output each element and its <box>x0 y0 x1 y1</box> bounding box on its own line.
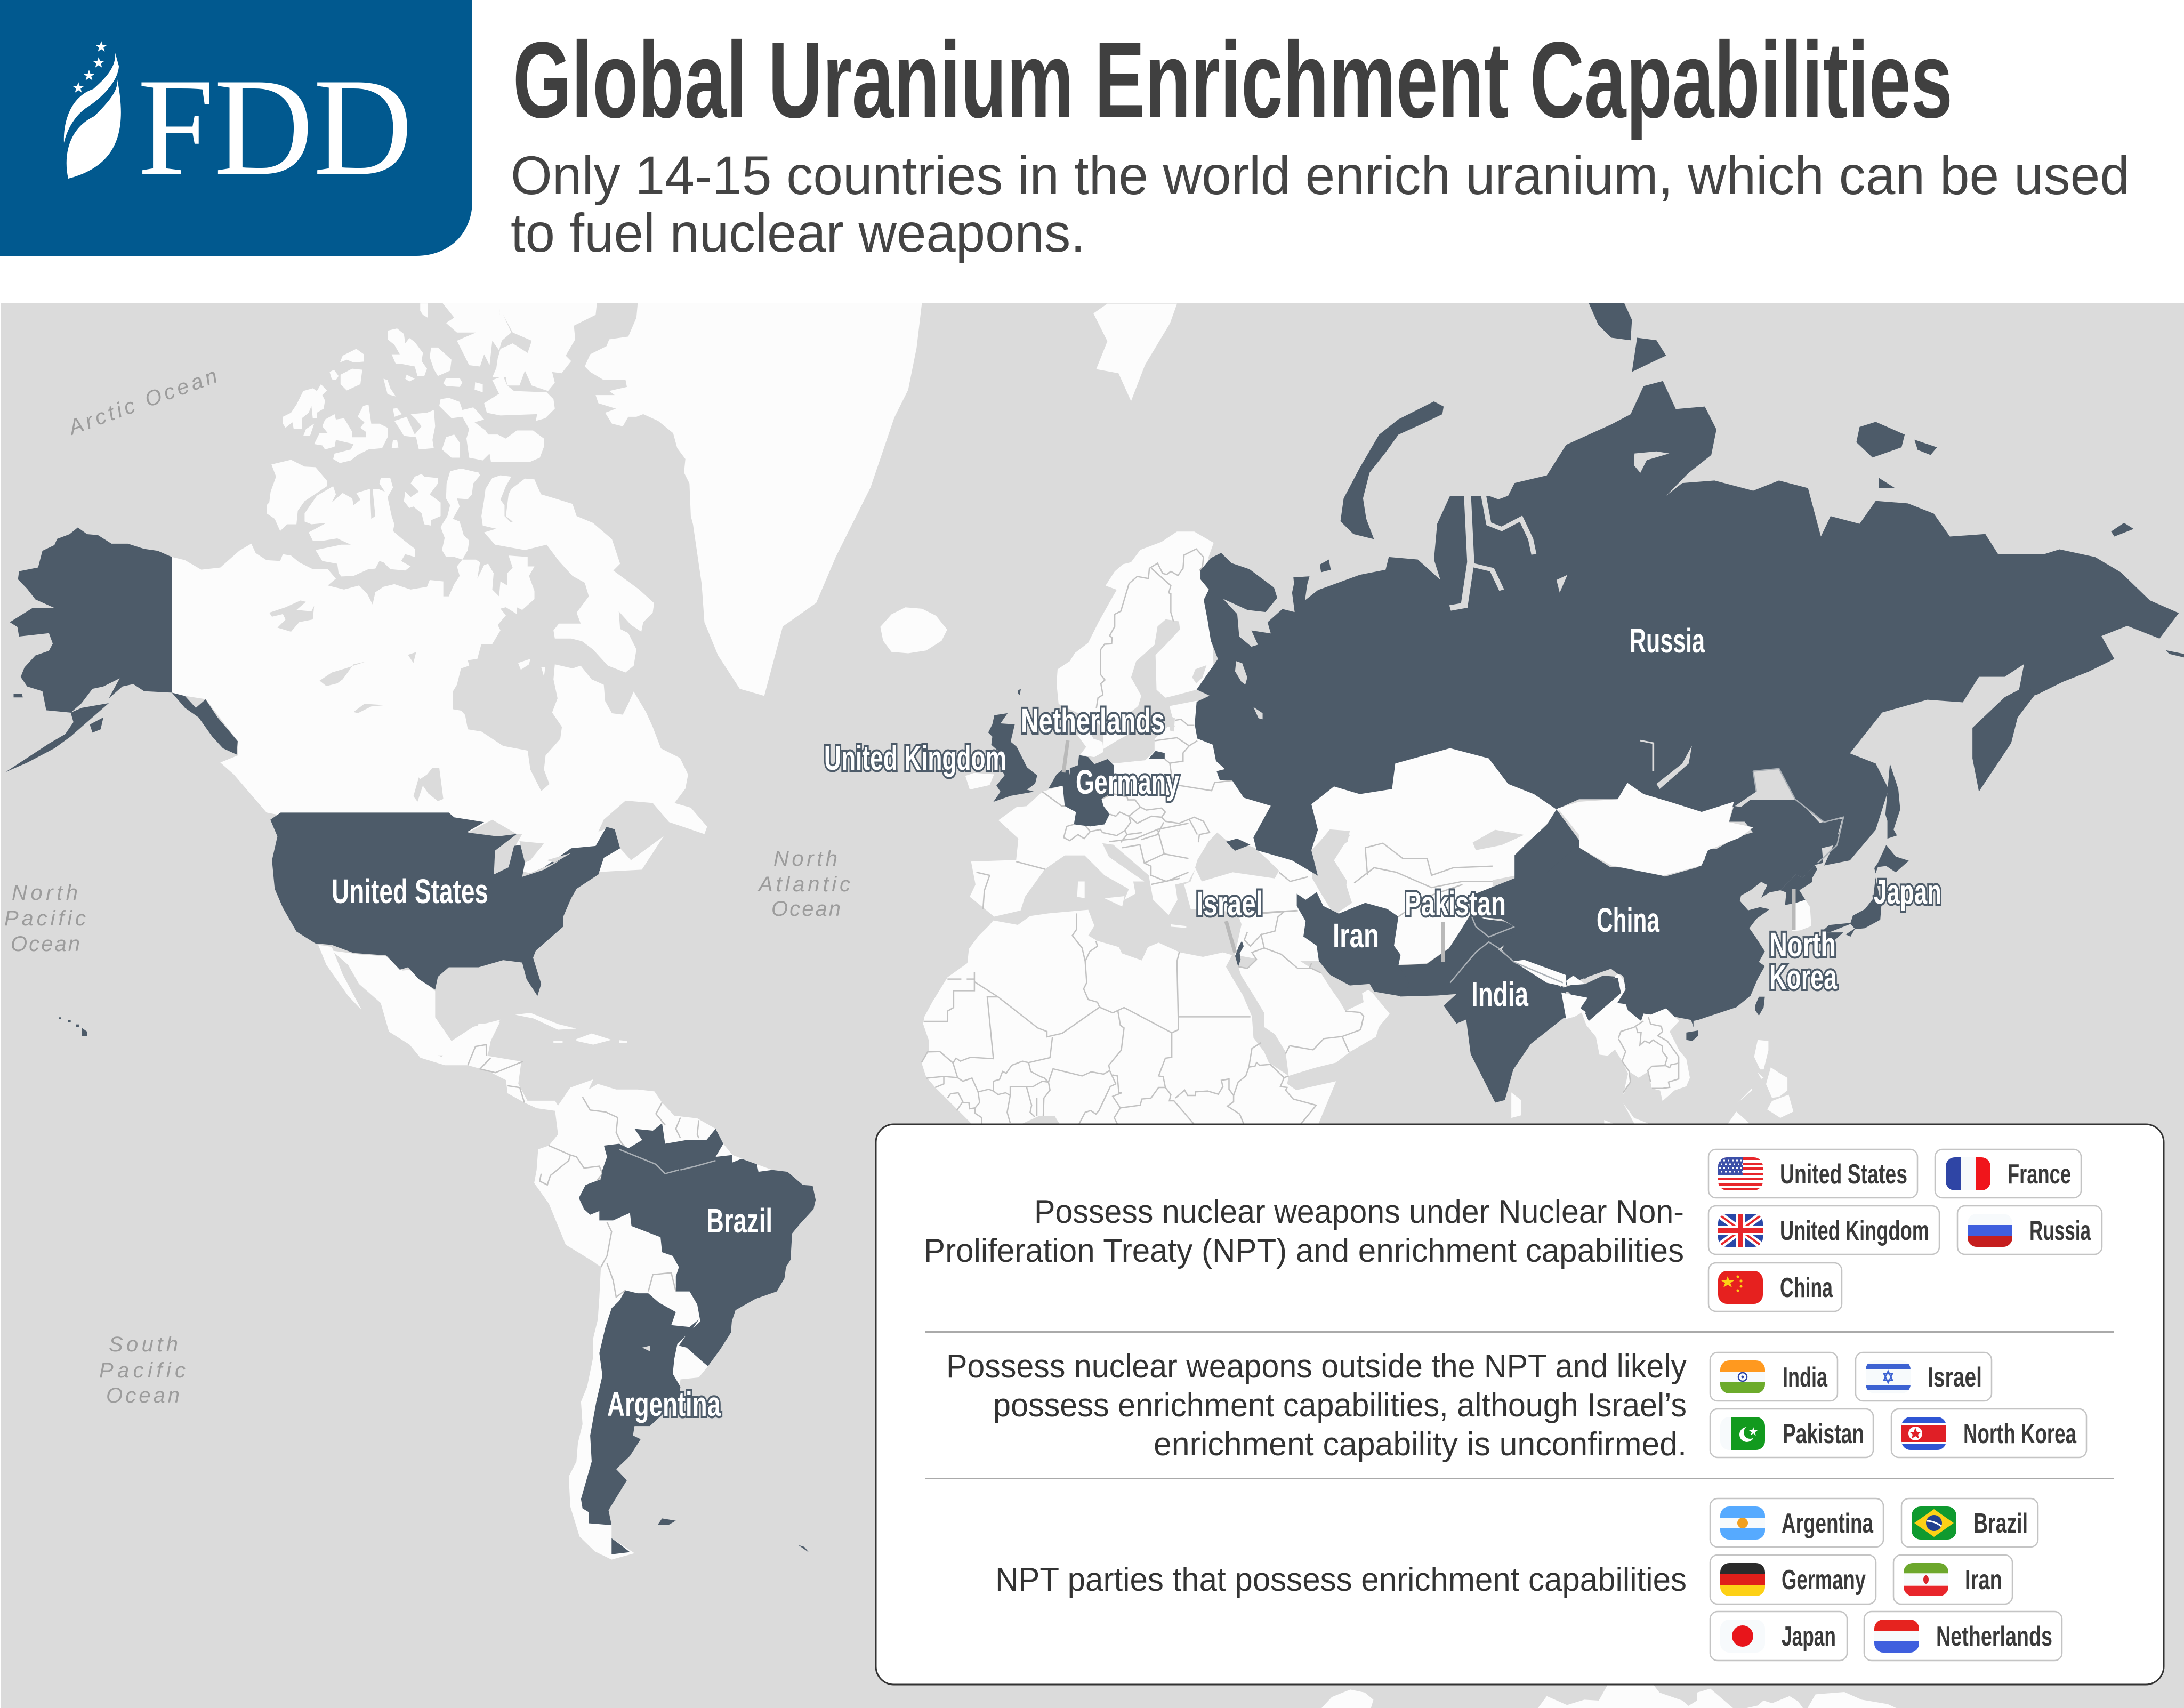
country: United States <box>5 527 620 1036</box>
flag: Brazil <box>1912 1506 1956 1540</box>
chip: Germany: Germany <box>1782 1565 1866 1596</box>
Russian exclaves: Kaliningrad and Crimea <box>1148 751 1165 759</box>
logo block <box>0 0 472 256</box>
legend text: outside NPT: enrichment capability is unconfirmed. <box>1154 1426 1687 1463</box>
chip: Germany <box>1710 1555 1876 1604</box>
Great Lakes basin water <box>492 834 522 877</box>
ocean labels <box>4 364 850 1407</box>
flag: Israel <box>1866 1360 1911 1393</box>
highlighted countries <box>5 303 2184 1554</box>
label: South Pacific Ocean: Pacific <box>99 1359 186 1382</box>
chip: Russia <box>1957 1206 2102 1254</box>
chip: North Korea <box>1891 1409 2086 1457</box>
flag: United States <box>1718 1157 1763 1190</box>
land: Antarctica <box>1320 1685 1899 1708</box>
chip: France <box>1935 1149 2081 1198</box>
flag: Netherlands <box>1874 1620 1919 1653</box>
land: South-East Asia <box>1560 900 1811 1125</box>
chip: India <box>1710 1352 1838 1401</box>
legend text: NPT weapons states: Proliferation Treaty (NPT) and enrichment capabilities <box>924 1232 1684 1269</box>
chip: United States <box>1708 1149 1917 1198</box>
inland seas: Black Sea, Caspian, Baltic, Aral <box>1113 665 1524 915</box>
land: Europe and western Asia <box>965 701 1493 982</box>
chip: Iran <box>1893 1555 2012 1604</box>
borders: northern and central Europe <box>1042 549 1232 842</box>
label: North Atlantic Ocean: North <box>773 847 837 871</box>
label: South Pacific Ocean <box>99 1333 186 1407</box>
chip: Israel <box>1856 1352 1992 1401</box>
label: North Korea: Korea <box>1769 958 1837 996</box>
chip: Brazil: Brazil <box>1973 1508 2028 1539</box>
chip: Japan: Japan <box>1782 1621 1836 1652</box>
flag: Japan <box>1720 1620 1765 1653</box>
label: Russia: Russia <box>1630 622 1705 660</box>
country: Japan <box>1822 800 1909 943</box>
chip: China: China <box>1780 1272 1833 1303</box>
chip: Japan <box>1710 1612 1847 1661</box>
divider <box>925 1331 2114 1333</box>
label: South Pacific Ocean: South <box>109 1333 178 1356</box>
subtitle: to fuel nuclear weapons. <box>511 203 1085 263</box>
chip: China <box>1708 1263 1842 1311</box>
label: Netherlands: Netherlands <box>1021 702 1165 740</box>
borders: Africa and Arabia <box>922 911 1364 1124</box>
chip: Argentina: Argentina <box>1782 1508 1874 1539</box>
label: United States: United States <box>332 872 488 911</box>
chip: Netherlands <box>1864 1612 2062 1661</box>
label: Israel: Israel <box>1196 884 1263 923</box>
subtitle: Only 14-15 countries in the world enrich uranium, which can be used <box>511 145 2130 206</box>
country: Iran <box>1297 892 1409 996</box>
Baffin Island <box>484 479 654 673</box>
flag: Iran <box>1904 1563 1948 1596</box>
chip: North Korea: North Korea <box>1963 1419 2077 1449</box>
panel: legend <box>876 1124 2164 1685</box>
land: Arabian Peninsula <box>1238 938 1390 1076</box>
label: South Pacific Ocean: Ocean <box>106 1384 180 1407</box>
chip: Pakistan: Pakistan <box>1783 1419 1864 1449</box>
chip: Pakistan <box>1710 1409 1873 1457</box>
flag: Russia <box>1968 1214 2012 1247</box>
white patches: Mongolia, Nepal, Bhutan <box>1513 783 1753 1019</box>
countries: United Kingdom, Netherlands, Germany <box>988 689 1114 826</box>
country: Russia <box>1195 303 2184 876</box>
label: United Kingdom: United Kingdom <box>824 739 1006 777</box>
flag: France <box>1946 1157 1990 1190</box>
legend text: NPT weapons states: Possess nuclear weapons under Nuclear Non- <box>1034 1194 1684 1230</box>
land: Mexico <box>318 945 501 1056</box>
logo wordmark: FDD <box>138 50 413 204</box>
country borders <box>468 549 1679 1297</box>
chip: Israel: Israel <box>1928 1362 1982 1393</box>
flag: India <box>1720 1360 1765 1393</box>
legend text: NPT parties: NPT parties that possess enrichment capabilities <box>995 1561 1687 1598</box>
label: North Pacific Ocean: Ocean <box>11 932 80 956</box>
India north-east <box>1546 976 1616 1032</box>
chip: United States: United States <box>1780 1159 1907 1190</box>
land: Iceland and Svalbard <box>880 304 1177 653</box>
legend text: outside NPT: Possess nuclear weapons outside the NPT and likely <box>946 1348 1687 1385</box>
country: India and Pakistan <box>1398 914 1621 1102</box>
country: North Korea <box>1780 865 1817 905</box>
country labels <box>332 622 1941 1423</box>
legend text: outside NPT: possess enrichment capabilities, although Israel’s <box>993 1387 1687 1424</box>
legend text: NPT weapons states <box>924 1194 1684 1269</box>
label: North Korea: North <box>1769 925 1836 964</box>
land: Canada lakes <box>269 600 444 802</box>
Canada mainland <box>172 544 707 875</box>
chip: Russia: Russia <box>2029 1215 2091 1246</box>
chip: India: India <box>1783 1362 1828 1393</box>
chip: United Kingdom: United Kingdom <box>1780 1215 1929 1246</box>
label: North Korea <box>1769 925 1837 996</box>
label: North Pacific Ocean: Pacific <box>4 907 86 930</box>
label: Japan: Japan <box>1874 873 1941 911</box>
label: China: China <box>1597 901 1659 939</box>
label: Pakistan: Pakistan <box>1405 884 1506 923</box>
chip: Argentina <box>1710 1498 1883 1547</box>
label: North Atlantic Ocean: Ocean <box>771 897 841 921</box>
lakes and inlets over highlighted countries <box>468 452 1692 1351</box>
border lines on highlighted countries <box>1450 769 1843 983</box>
label: North Pacific Ocean <box>4 881 86 956</box>
flag: North Korea <box>1901 1417 1946 1450</box>
land: Central and South America <box>408 1013 816 1560</box>
logo leaf icon <box>64 41 121 179</box>
label: Brazil: Brazil <box>706 1202 772 1240</box>
leader lines <box>1063 740 1794 962</box>
Arctic islands <box>267 302 597 676</box>
borders: Central and South America <box>468 1045 699 1297</box>
label: Germany: Germany <box>1076 763 1179 801</box>
label: Iran: Iran <box>1333 916 1379 955</box>
legend text: outside NPT <box>946 1348 1687 1463</box>
label: Arctic Ocean: Arctic Ocean <box>65 364 220 440</box>
flag: Argentina <box>1720 1506 1765 1540</box>
chip: Netherlands: Netherlands <box>1936 1621 2052 1652</box>
chip: United Kingdom <box>1708 1206 1939 1254</box>
chip: Brazil <box>1901 1498 2038 1547</box>
flag: United Kingdom <box>1718 1214 1763 1247</box>
label: Argentina: Argentina <box>607 1385 721 1423</box>
chip: France: France <box>2008 1159 2071 1190</box>
label: North Pacific Ocean: North <box>12 881 78 905</box>
divider <box>925 1478 2114 1479</box>
countries: Brazil and Argentina <box>579 1123 816 1554</box>
borders: southern Europe, Caucasus, central Asia <box>977 823 1493 965</box>
land: central Asia, Korea, SE Asia <box>1366 748 1560 1118</box>
land: Scandinavia <box>1057 531 1215 757</box>
subtitle <box>511 145 2130 263</box>
land: Africa <box>922 910 1390 1126</box>
label: North Atlantic Ocean <box>757 847 850 921</box>
flag: China <box>1718 1271 1763 1304</box>
label: North Atlantic Ocean: Atlantic <box>757 873 850 896</box>
label: India: India <box>1471 975 1528 1013</box>
flag: Germany <box>1720 1563 1765 1596</box>
borders: South-East Asia <box>1618 1017 1679 1093</box>
chip: Iran: Iran <box>1965 1565 2002 1596</box>
land: North America and Arctic <box>172 302 922 875</box>
flag: Pakistan <box>1720 1417 1765 1450</box>
country: China <box>1470 800 1842 1041</box>
country: Israel <box>1235 941 1244 966</box>
Greenland <box>585 302 922 696</box>
